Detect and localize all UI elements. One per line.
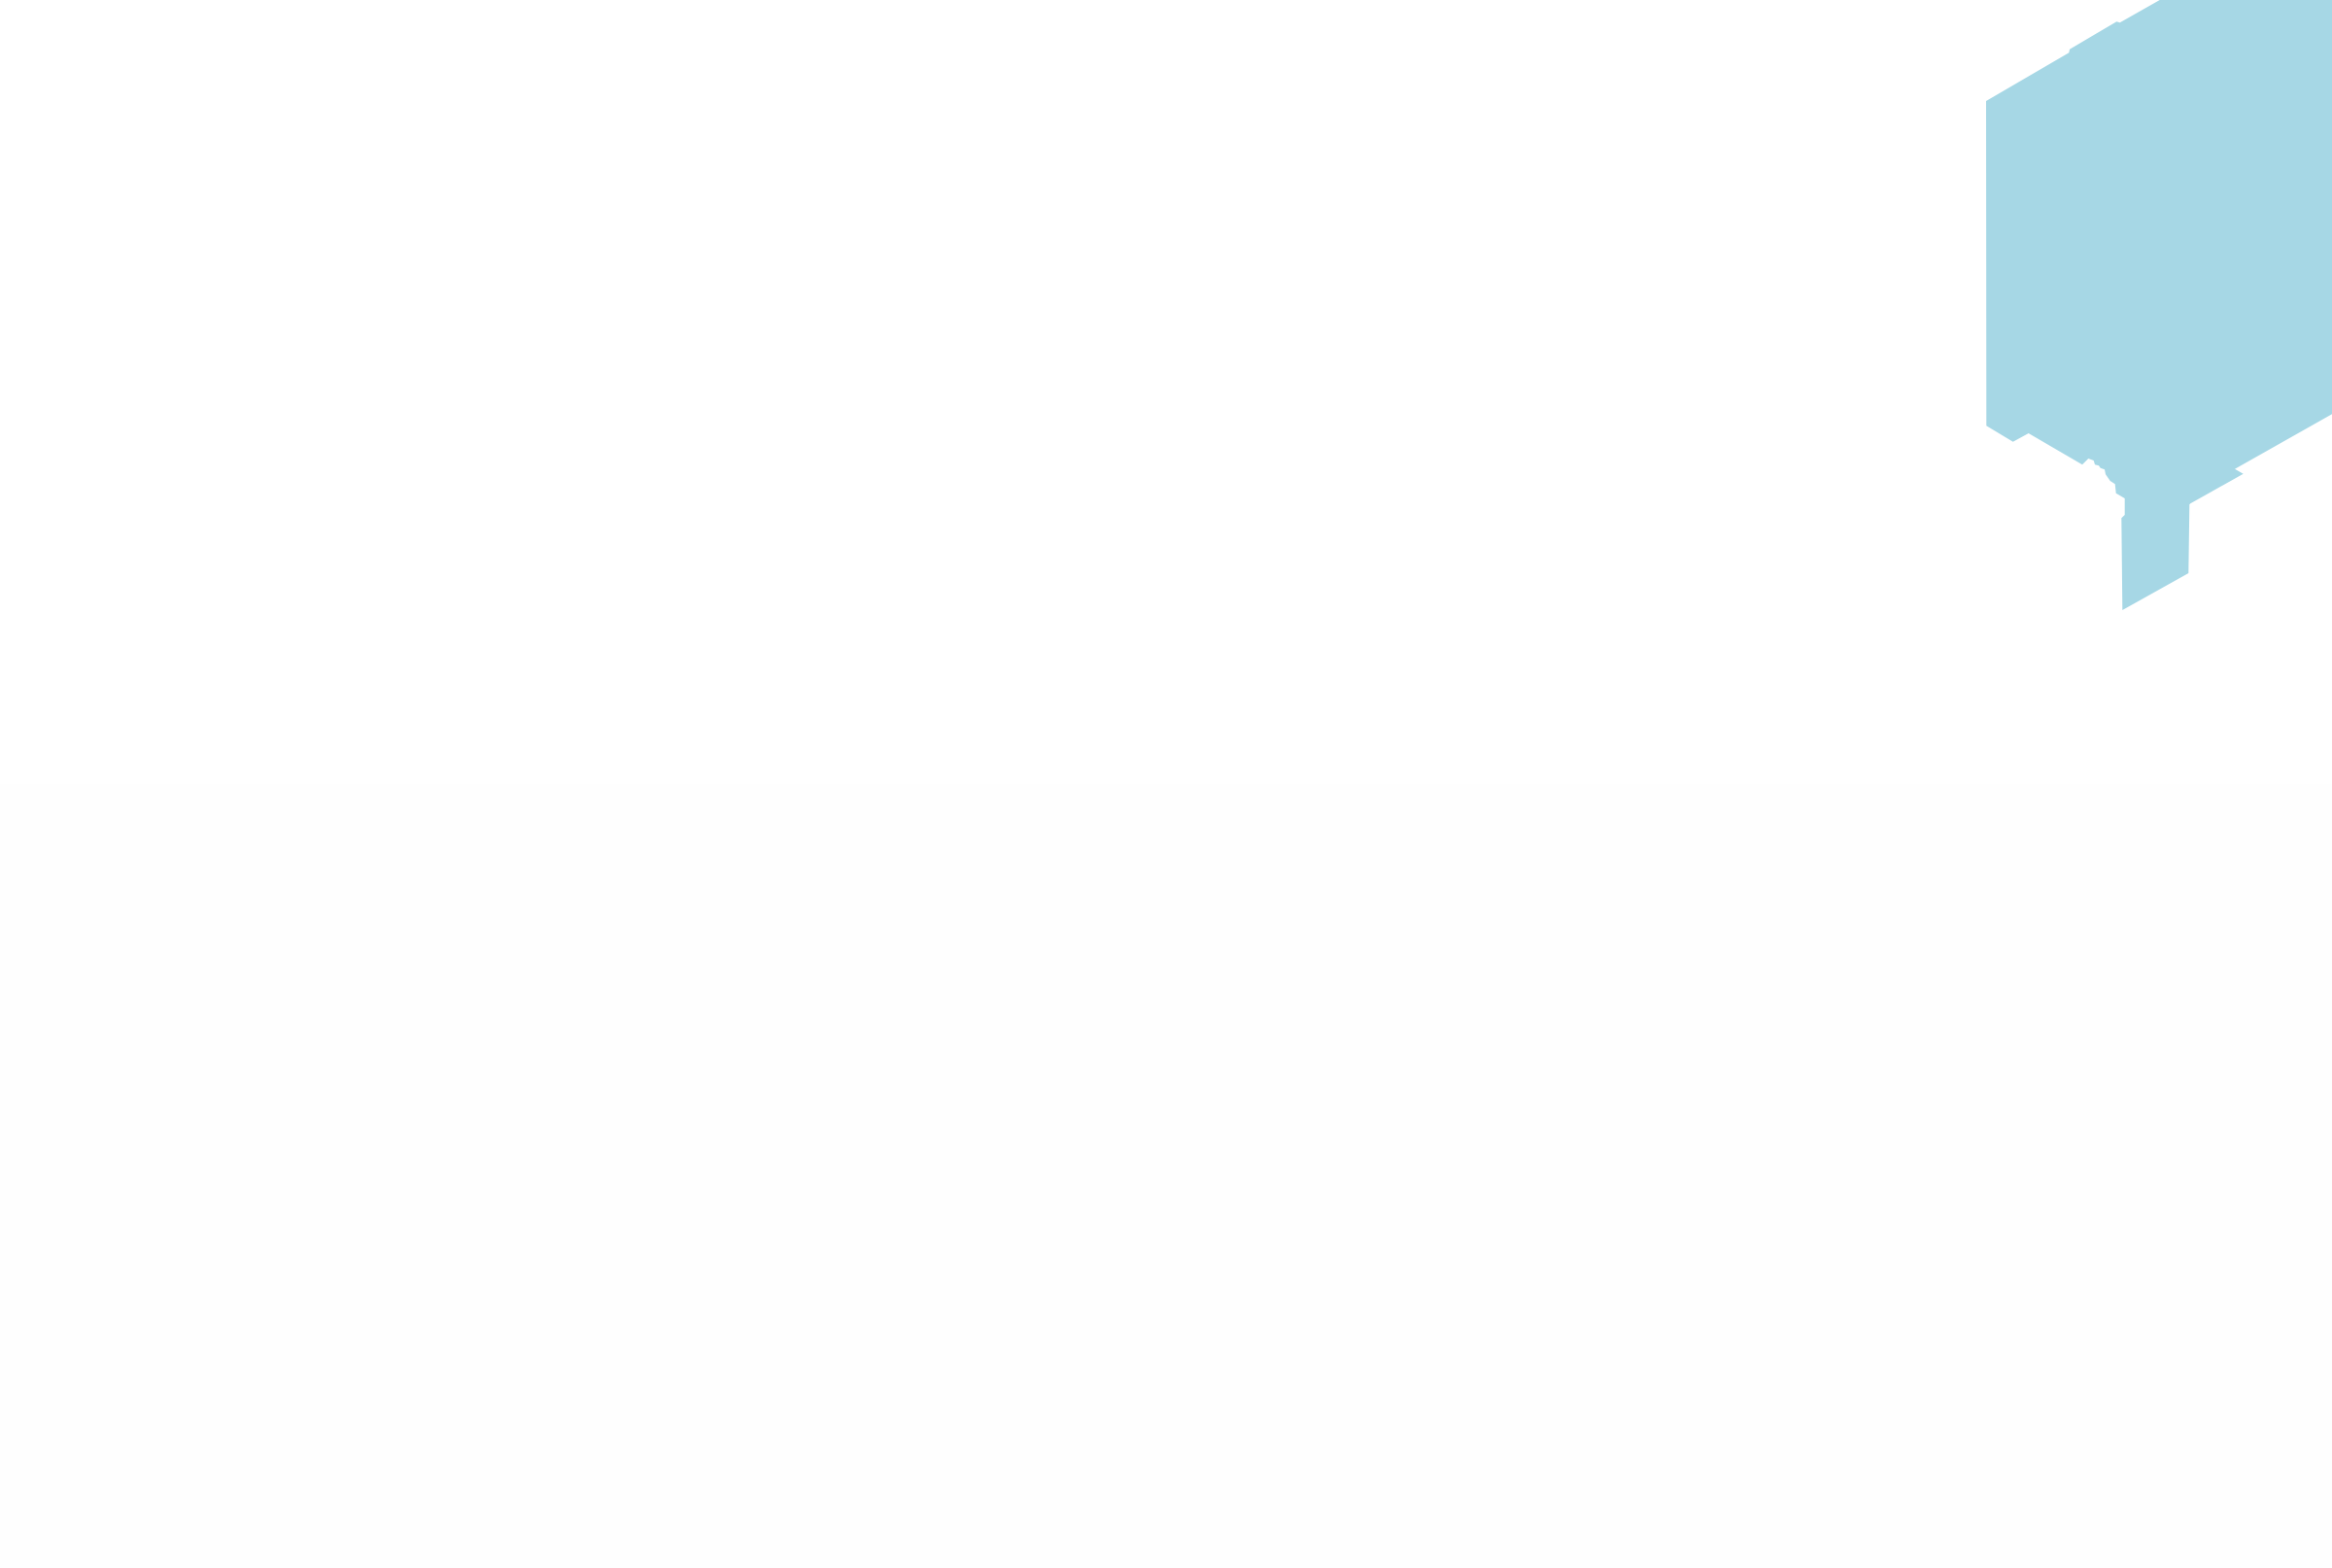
light blue isometric block shape: [1986, 0, 2332, 610]
